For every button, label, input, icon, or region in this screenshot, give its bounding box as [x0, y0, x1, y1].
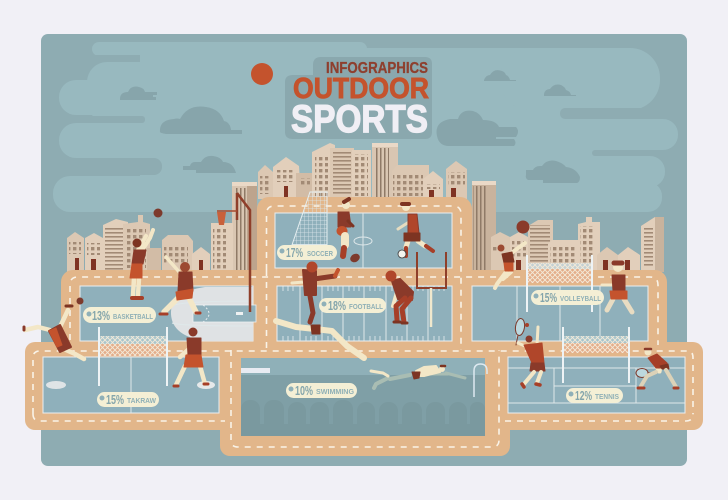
player: takraw server [174, 328, 208, 386]
volleyball court [472, 286, 648, 341]
basketball hoop [217, 193, 250, 312]
track lane dashes [33, 206, 693, 447]
player: swimmer [371, 366, 465, 388]
football court [277, 286, 452, 341]
player: football lineman [386, 270, 413, 323]
player: volleyball spiker [495, 220, 530, 288]
running track [25, 197, 703, 456]
label: soccer [277, 245, 337, 260]
sun [251, 63, 273, 85]
tennis court [508, 357, 685, 413]
player: volleyball receiver [602, 262, 632, 312]
player: tennis returner [636, 348, 678, 388]
label: tennis: TENNIS [595, 392, 619, 401]
label: tennis [566, 388, 623, 403]
label: volleyball [531, 290, 604, 305]
takraw court [43, 357, 219, 413]
soccer court [275, 213, 452, 268]
buildings: left skyline [67, 215, 233, 272]
tennis net [563, 327, 629, 383]
player: basketball jumper [130, 208, 162, 298]
title: INFOGRAPHICS [326, 60, 428, 77]
title: OUTDOOR [293, 73, 429, 105]
label: takraw [97, 392, 159, 407]
player: football kicker [292, 262, 338, 322]
player: soccer kicker [398, 203, 433, 258]
label: soccer: SOCCER [307, 249, 333, 258]
label: football: FOOTBALL [349, 302, 383, 311]
label: football: 18% [328, 298, 346, 313]
soccer goal [292, 192, 327, 245]
title: SPORTS [291, 98, 428, 141]
light cloud bands [53, 42, 678, 212]
label: soccer: 17% [286, 245, 303, 260]
volleyball net [527, 255, 592, 312]
takraw net [99, 327, 167, 386]
player: tennis server [514, 318, 545, 387]
label: swimming: 10% [295, 383, 313, 398]
label: football [319, 298, 386, 313]
label: volleyball: 15% [540, 290, 557, 305]
dark clouds [120, 70, 580, 183]
title [285, 57, 432, 141]
label: basketball: 13% [92, 308, 110, 323]
football goal posts [417, 252, 446, 327]
label: basketball: BASKETBALL [113, 312, 153, 321]
label: takraw: TAKRAW [127, 396, 157, 405]
label: swimming: SWIMMING [316, 387, 354, 396]
label: tennis: 12% [575, 388, 592, 403]
buildings: centre skyline [232, 143, 496, 272]
player: soccer attacker [336, 199, 361, 264]
label: takraw: 15% [106, 392, 124, 407]
basketball court [80, 286, 256, 341]
label: swimming [286, 383, 357, 398]
swimming pool [241, 358, 487, 436]
buildings: right skyline [491, 217, 664, 272]
player: diver [276, 321, 364, 358]
cloud gaps [59, 55, 685, 175]
panel: sky background [41, 34, 687, 466]
label: basketball [83, 307, 156, 323]
player: takraw kicker [24, 298, 84, 359]
player: basketball defender [160, 257, 200, 314]
label: volleyball: VOLLEYBALL [560, 294, 601, 303]
